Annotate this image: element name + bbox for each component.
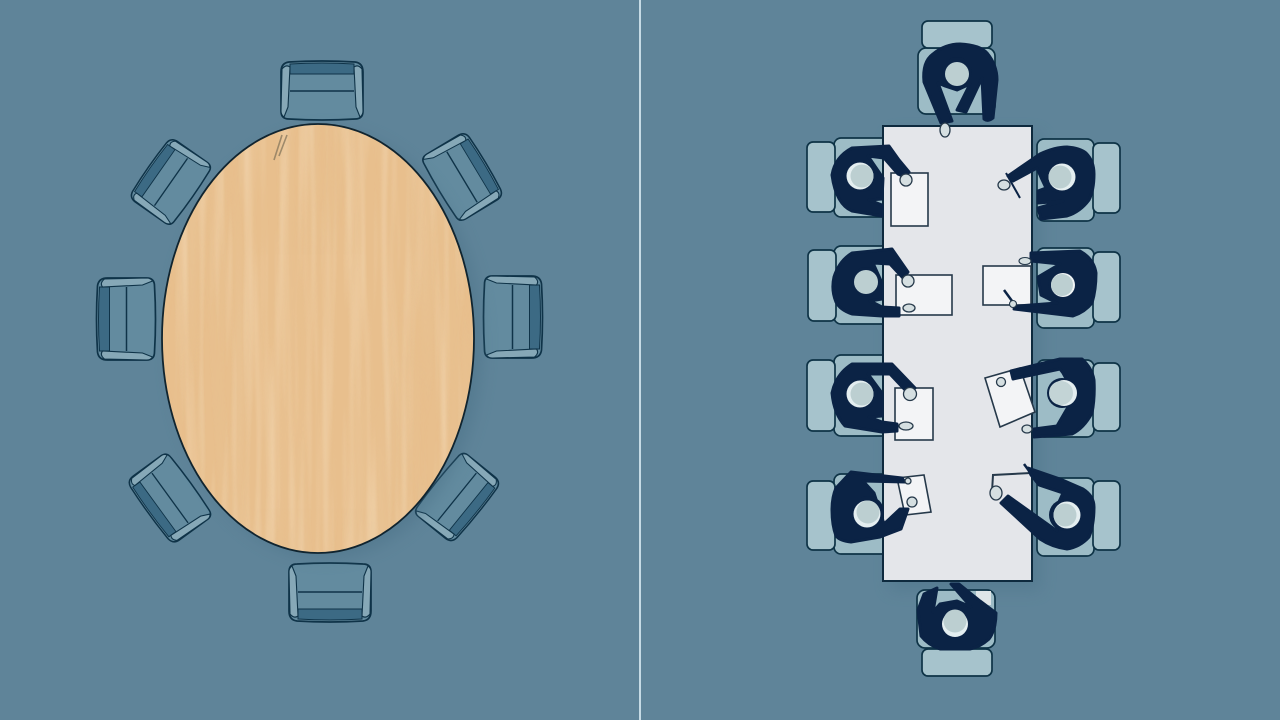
person: right row 1 xyxy=(998,147,1094,219)
chair: upper left xyxy=(128,136,214,227)
chair: top xyxy=(281,61,363,120)
chair: bottom person xyxy=(917,590,995,676)
person: top xyxy=(924,44,997,137)
person: bottom xyxy=(918,584,996,649)
head xyxy=(852,496,884,528)
head xyxy=(1048,270,1078,300)
chair: lower right xyxy=(412,450,502,544)
torso and arms xyxy=(1008,147,1094,219)
oval wooden table xyxy=(160,120,482,558)
table shadow xyxy=(890,134,1040,590)
torso and arms xyxy=(833,249,908,316)
head xyxy=(846,160,878,192)
torso and arms xyxy=(832,472,908,542)
pen xyxy=(1024,464,1032,475)
hands xyxy=(996,378,1032,433)
person: left row 4 xyxy=(832,472,917,542)
person: left row 1 xyxy=(832,146,912,216)
chair: lower left xyxy=(126,451,214,545)
hands xyxy=(899,388,916,430)
chair: left xyxy=(96,278,156,360)
panel: rectangular table with seated people xyxy=(807,21,1120,676)
torso and arms xyxy=(1014,251,1096,316)
chair: top person xyxy=(918,21,995,114)
chairs: left side xyxy=(807,138,894,554)
hand xyxy=(900,174,912,186)
hand xyxy=(998,180,1010,190)
hands xyxy=(905,478,917,507)
person: right row 2 xyxy=(1004,251,1096,316)
torso and arms xyxy=(924,44,997,123)
chair: bottom xyxy=(289,563,371,622)
hands xyxy=(1010,258,1031,308)
rectangular white table xyxy=(883,126,1032,581)
hand xyxy=(990,486,1002,500)
head xyxy=(1047,378,1077,408)
person: right row 4 xyxy=(990,464,1094,549)
person: left row 2 xyxy=(833,249,915,316)
head xyxy=(851,267,881,297)
chairs: right side xyxy=(1037,139,1120,556)
torso and arms xyxy=(832,364,915,432)
hand xyxy=(940,123,950,137)
head xyxy=(846,378,878,410)
chair: upper right xyxy=(420,130,505,223)
torso and arms xyxy=(832,146,909,216)
divider line xyxy=(639,0,641,720)
paper corner xyxy=(976,591,991,605)
torso and arms xyxy=(1011,359,1094,437)
chair: right xyxy=(484,276,542,358)
head xyxy=(1044,161,1076,193)
head xyxy=(942,57,972,87)
person: left row 3 xyxy=(832,364,916,432)
torso and arms xyxy=(918,584,996,649)
person: right row 3 xyxy=(996,359,1094,437)
panel: oval table with empty chairs xyxy=(96,61,542,622)
hands xyxy=(902,275,915,312)
head xyxy=(940,607,970,637)
papers on table xyxy=(891,173,1035,515)
pen xyxy=(1006,173,1020,198)
pen xyxy=(1004,290,1015,305)
torso and arms xyxy=(1001,468,1094,549)
head xyxy=(1049,499,1081,531)
